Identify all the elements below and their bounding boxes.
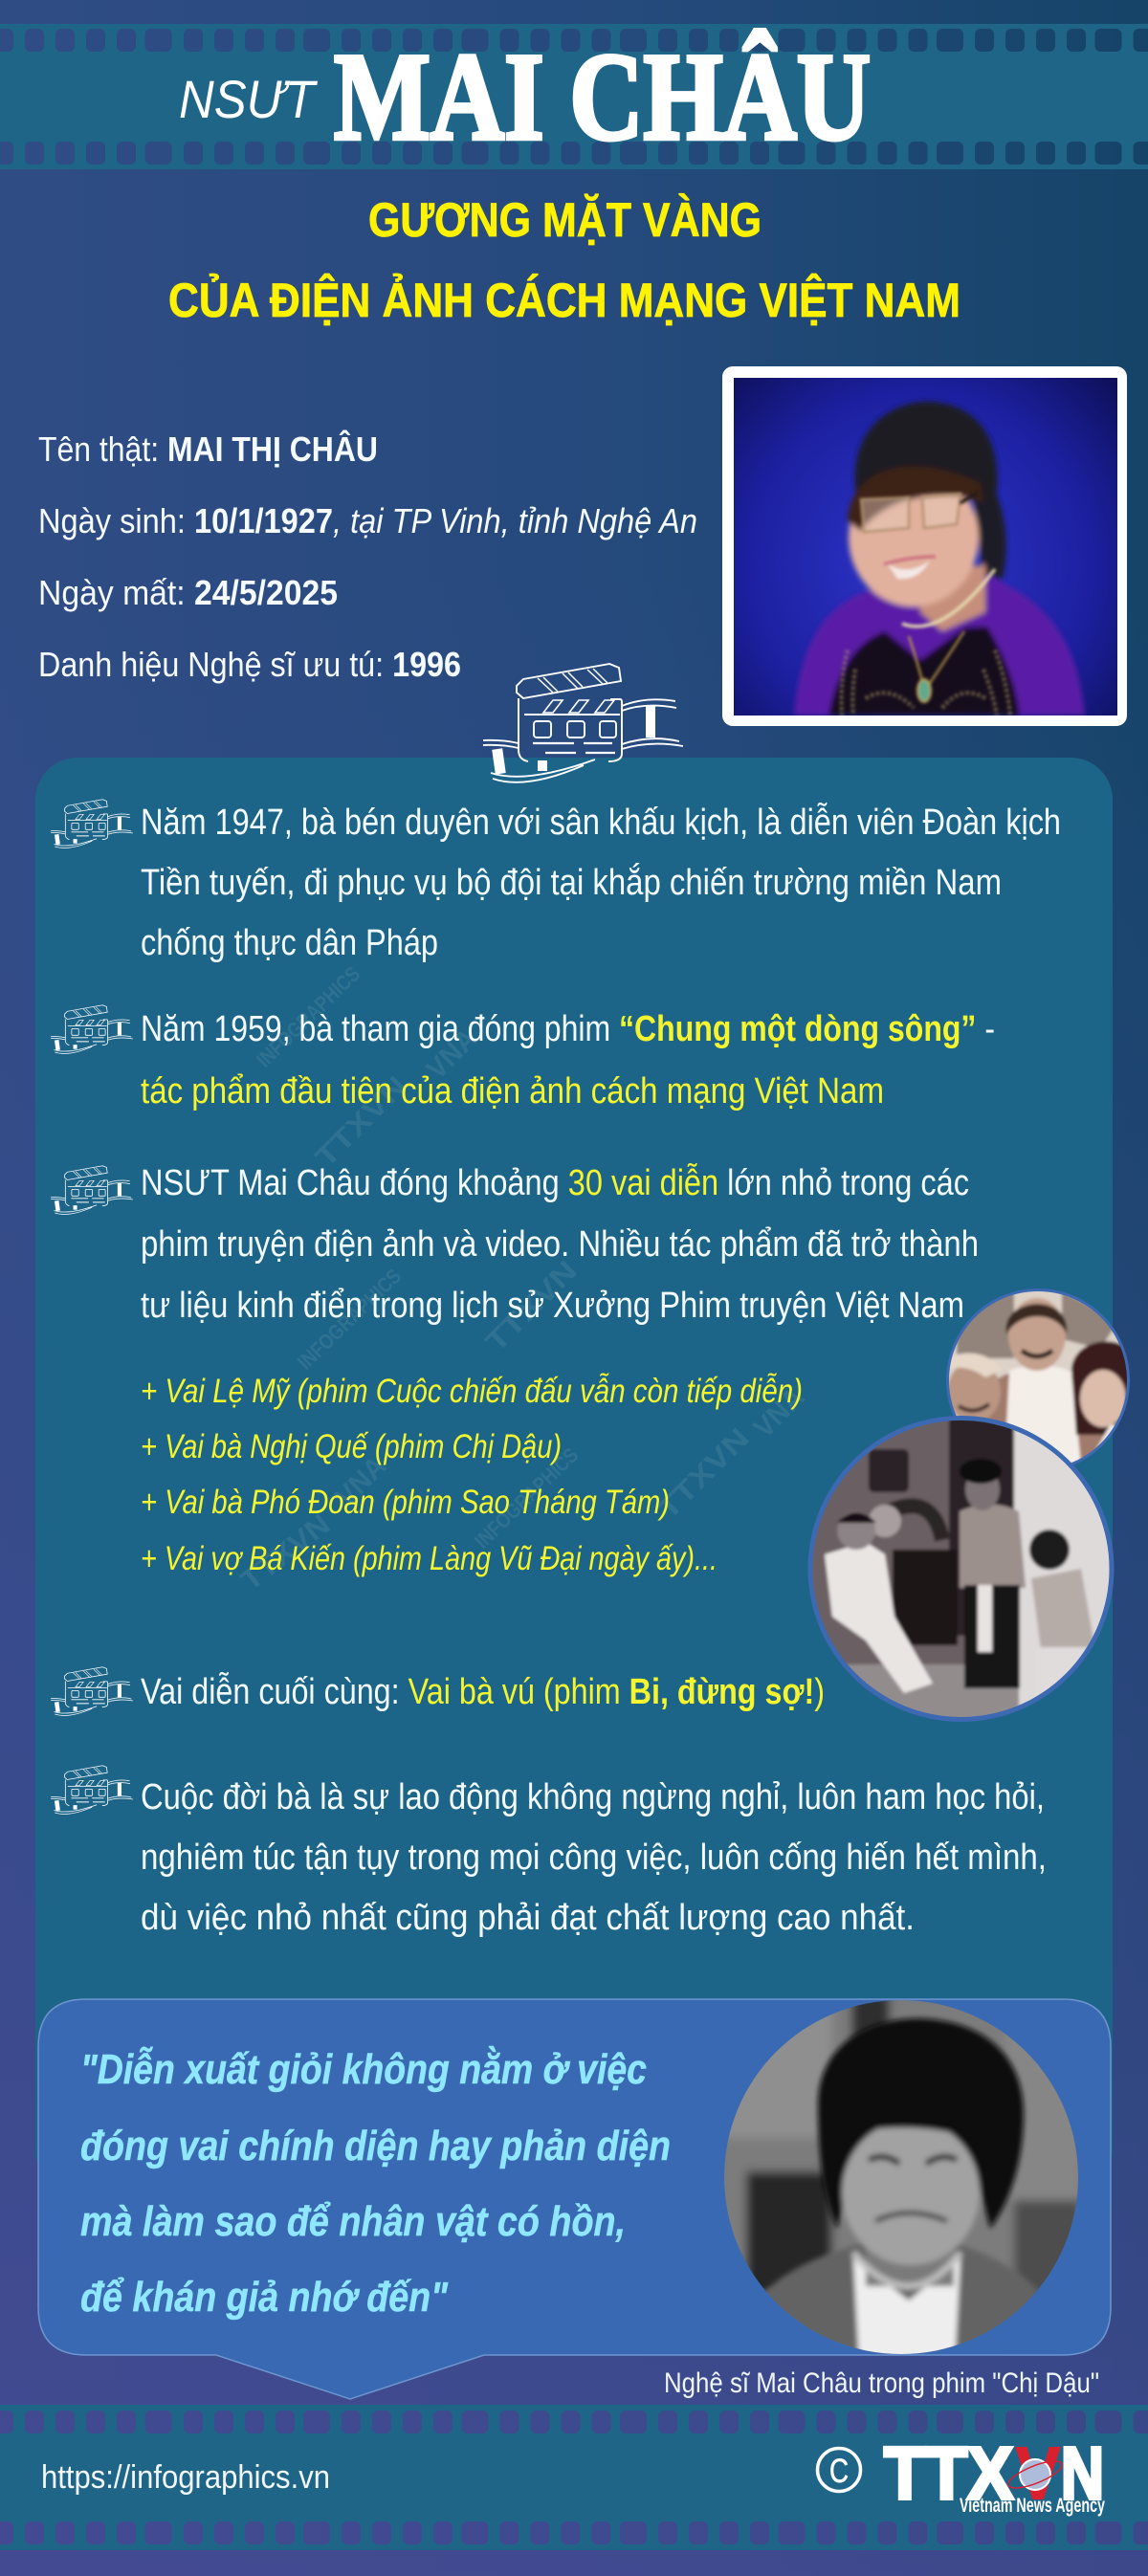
- subtitle: [168, 193, 960, 327]
- icon: copyright: [817, 2449, 861, 2491]
- list of film roles: [141, 1373, 803, 1577]
- bullet: roles: [51, 1162, 979, 1326]
- text block: life: [141, 1777, 1047, 1938]
- biography facts: [38, 429, 697, 684]
- watermarks: TTXVN: [235, 1508, 336, 1597]
- text block: 1947: [141, 802, 1061, 963]
- biography facts: Tên thật: MAI THỊ CHÂU: [38, 429, 378, 469]
- watermarks: INFOGRAPHICS: [252, 961, 364, 1072]
- watermarks: TTXVN: [652, 1422, 756, 1526]
- biography facts: Ngày sinh: 10/1/1927, tại TP Vinh, tỉnh Nghệ An: [38, 501, 697, 540]
- icon: clapperboard: [51, 1766, 133, 1814]
- icon: copyright: C: [829, 2453, 849, 2490]
- text block: 1959: Năm 1959, bà tham gia đóng phim “Chung một dòng sông” -: [141, 1009, 995, 1049]
- icon: clapperboard: [51, 1166, 133, 1214]
- watermarks: VNA: [421, 1023, 483, 1086]
- bullet: last role: [51, 1667, 825, 1715]
- bullet: 1959: [51, 1005, 995, 1112]
- text block: 1959: tác phẩm đầu tiên của điện ảnh cách mạng Việt Nam: [141, 1071, 884, 1112]
- text block: 1959: [141, 1009, 995, 1112]
- list of film roles: + Vai bà Phó Đoan (phim Sao Tháng Tám): [141, 1484, 670, 1521]
- wordmark: V: [1016, 2433, 1060, 2515]
- text block: roles: [141, 1162, 979, 1326]
- watermarks: INFOGRAPHICS: [470, 1442, 583, 1553]
- portrait photo in white frame: [722, 366, 1127, 726]
- list of film roles: + Vai bà Nghị Quế (phim Chị Dậu): [141, 1428, 562, 1465]
- quote text: mà làm sao để nhân vật có hồn,: [80, 2198, 626, 2245]
- main content panel: [35, 758, 1113, 2192]
- circular photo: scene from film: [807, 1416, 1115, 1722]
- quote text: [80, 2044, 671, 2321]
- watermarks: [235, 961, 810, 1597]
- globe: [1005, 2455, 1065, 2494]
- list of film roles: + Vai vợ Bá Kiến (phim Làng Vũ Đại ngày ấy)...: [141, 1540, 718, 1577]
- text block: 1947: chống thực dân Pháp: [141, 923, 438, 963]
- circular photo: group of three actors: [946, 1288, 1130, 1465]
- text block: roles: tư liệu kinh điển trong lịch sử Xưởng Phim truyện Việt Nam: [141, 1286, 964, 1326]
- subtitle: GƯƠNG MẶT VÀNG: [368, 193, 762, 247]
- watermarks: VNA: [748, 1381, 810, 1444]
- title: NSƯT Mai Châu: [179, 28, 871, 166]
- watermarks: INFOGRAPHICS: [293, 1264, 406, 1375]
- quote text: "Diễn xuất giỏi không nằm ở việc: [80, 2044, 647, 2093]
- title prefix: NSƯT: [179, 69, 318, 129]
- wordmark: TTX: [884, 2433, 1013, 2515]
- subtitle: CỦA ĐIỆN ẢNH CÁCH MẠNG VIỆT NAM: [168, 273, 960, 327]
- biography facts: Ngày mất: 24/5/2025: [38, 573, 338, 612]
- logo: TTXVN: [817, 2433, 1105, 2517]
- website url: https://infographics.vn: [41, 2459, 330, 2496]
- icon: clapperboard: [51, 1667, 133, 1715]
- biography facts: Danh hiệu Nghệ sĩ ưu tú: 1996: [38, 645, 461, 684]
- text block: roles: phim truyện điện ảnh và video. Nhiều tác phẩm đã trở thành: [141, 1224, 979, 1265]
- icon: large clapperboard with film strip: [483, 664, 683, 782]
- quote text: đóng vai chính diện hay phản diện: [80, 2123, 671, 2169]
- title name: MAI CHÂU: [334, 28, 871, 166]
- wordmark: N: [1061, 2433, 1104, 2515]
- text block: roles: NSƯT Mai Châu đóng khoảng 30 vai diễn lớn nhỏ trong các: [141, 1162, 969, 1203]
- watermarks: TTXVN: [480, 1255, 584, 1358]
- quote bubble: [38, 1999, 1111, 2399]
- quote text: để khán giả nhớ đến": [80, 2274, 449, 2321]
- text block: life: dù việc nhỏ nhất cũng phải đạt chất lượng cao nhất.: [141, 1898, 915, 1938]
- circular photo: Mai Châu in Chị Dậu: [718, 1994, 1086, 2363]
- bottom film strip footer: [0, 2405, 1148, 2550]
- icon: clapperboard: [51, 800, 133, 848]
- list of film roles: + Vai Lệ Mỹ (phim Cuộc chiến đấu vẫn còn tiếp diễn): [141, 1373, 803, 1410]
- icon: clapperboard: [51, 1005, 133, 1053]
- bullet: 1947: [51, 800, 1061, 963]
- top film strip banner: [0, 24, 1148, 169]
- text: last role: Vai diễn cuối cùng: Vai bà vú (phim Bi, đừng sợ!): [141, 1671, 825, 1712]
- watermarks: VNA: [330, 1450, 392, 1513]
- wordmark: [884, 2433, 1104, 2515]
- bullet: life: [51, 1766, 1047, 1938]
- text block: 1947: Tiền tuyến, đi phục vụ bộ đội tại khắp chiến trường miền Nam: [141, 862, 1002, 903]
- watermarks: TTXVN: [310, 1070, 413, 1174]
